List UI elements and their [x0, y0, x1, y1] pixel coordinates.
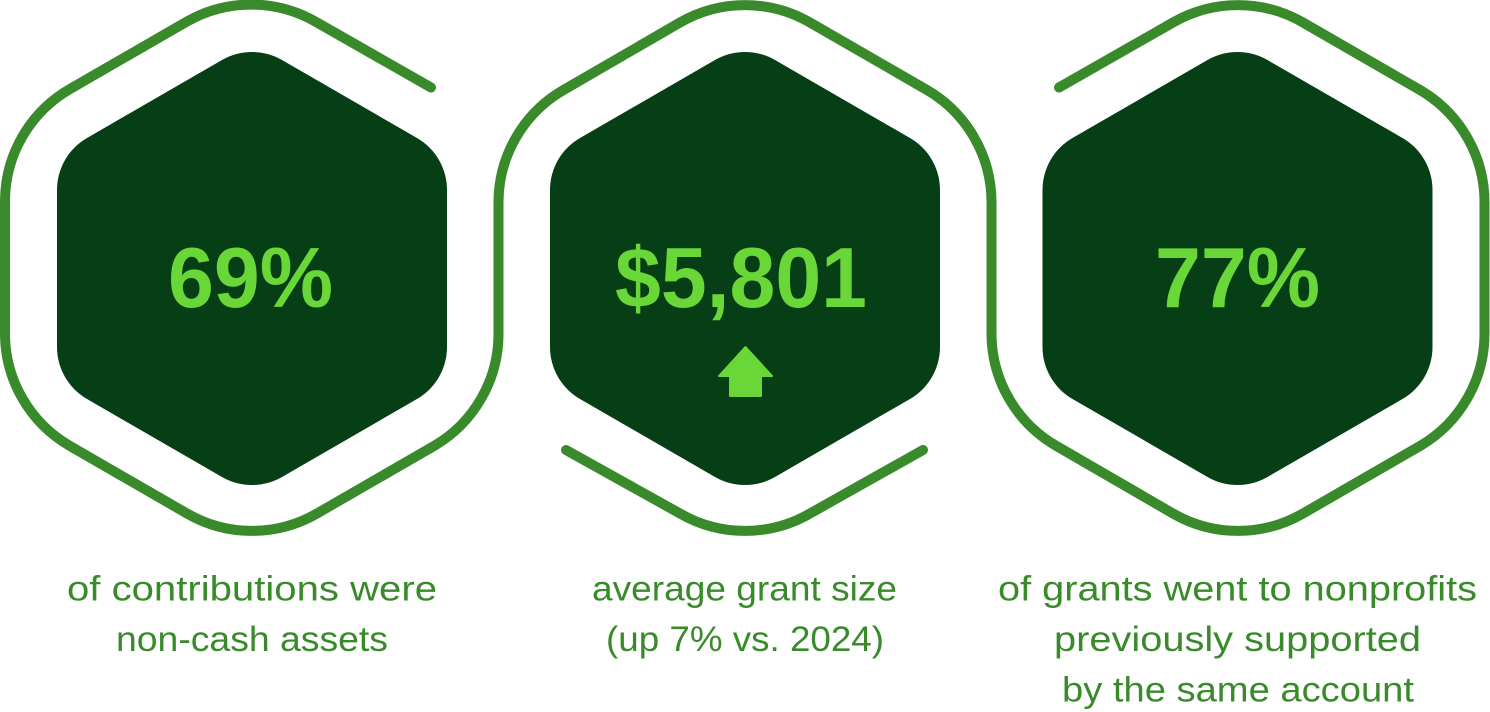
caption: non-cash assets [67, 570, 437, 659]
panel: $5,801 average grant [550, 52, 940, 659]
stat: 69%: 69% [168, 231, 333, 326]
caption: non-cash assets: of contributions were [67, 570, 437, 608]
caption: previously supported nonprofits: previously supported [1054, 620, 1421, 659]
hexagon: 77% [1042, 52, 1432, 485]
stat: 77%: 77% [1155, 231, 1320, 326]
caption: average grant size: average grant size [592, 570, 897, 608]
outline segment under the middle hexagon [566, 450, 923, 531]
caption: average grant size [592, 570, 897, 659]
caption: previously supported nonprofits: by the same account [1062, 670, 1414, 710]
continuous outline linking the three hexagons [5, 5, 1485, 531]
caption: previously supported nonprofits [998, 570, 1477, 710]
panel: 69% non-cash contributions [57, 52, 447, 659]
hexagon: 69% [57, 52, 447, 485]
caption: average grant size: (up 7% vs. 2024) [606, 620, 884, 659]
stat: $5,801: $5,801 [615, 231, 867, 326]
caption: previously supported nonprofits: of grants went to nonprofits [998, 570, 1477, 608]
panel: 77% previously supported [998, 52, 1477, 709]
icon: up arrow [719, 347, 772, 396]
hexagon: $5,801 [550, 52, 940, 485]
caption: non-cash assets: non-cash assets [116, 620, 388, 659]
